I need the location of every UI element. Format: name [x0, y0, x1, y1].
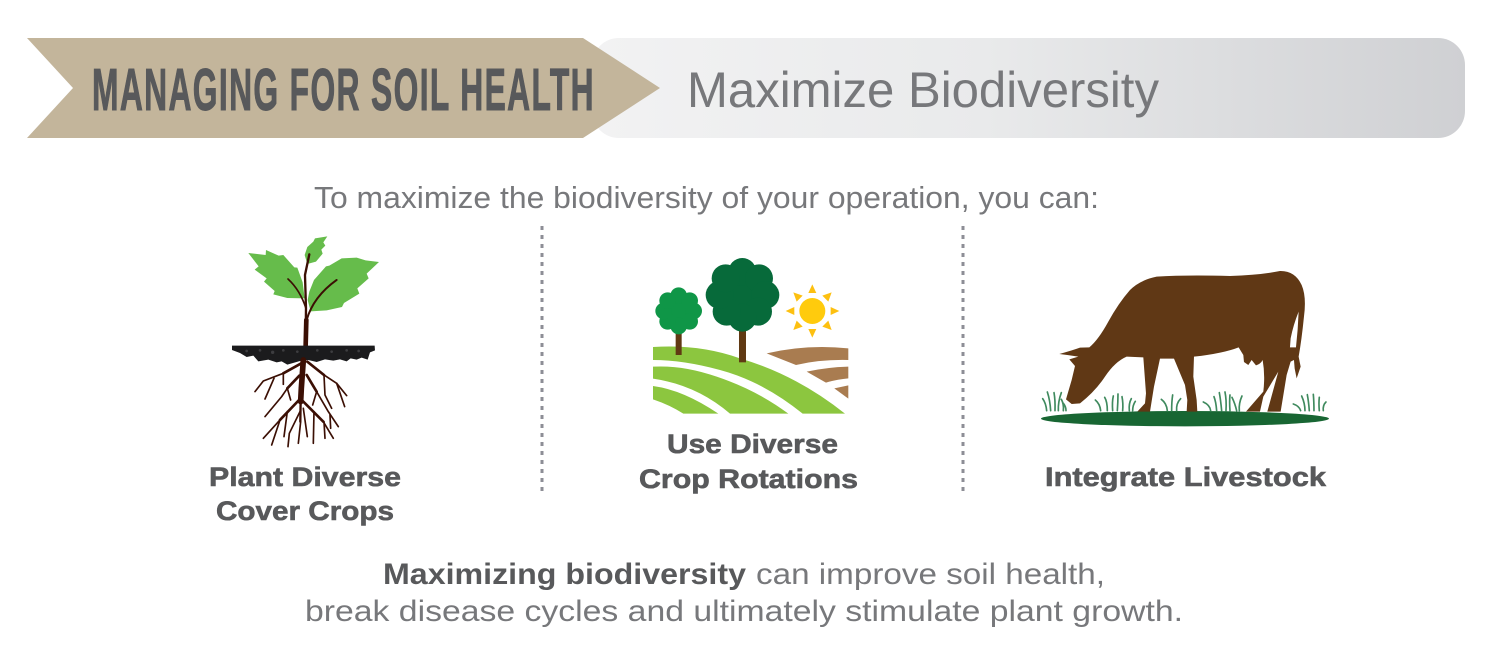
- leaves: [248, 236, 379, 311]
- closing statement: break disease cycles and ultimately stimulate plant growth.: [305, 595, 1183, 628]
- icon: plant with roots: [232, 236, 379, 447]
- label: integrate livestock: Integrate Livestock: [1045, 462, 1327, 492]
- cow silhouette: [1059, 271, 1305, 412]
- label: use diverse crop rotations: Use Diverse: [667, 429, 838, 459]
- large tree: [706, 258, 779, 362]
- label: use diverse crop rotations: [639, 429, 858, 494]
- roots: [255, 360, 347, 447]
- ground: [1041, 411, 1329, 426]
- subtitle: Maximize Biodiversity: [687, 62, 1159, 118]
- header subtitle bar: [592, 38, 1465, 138]
- title: MANAGING FOR SOIL HEALTH: [92, 57, 595, 123]
- intro sentence: To maximize the biodiversity of your operation, you can:: [314, 180, 1099, 215]
- closing statement: [305, 558, 1183, 628]
- sun: [786, 284, 839, 338]
- header title ribbon: [27, 38, 660, 138]
- label: plant diverse cover crops: [209, 462, 401, 526]
- icon: grazing cow: [1041, 271, 1329, 426]
- small tree: [655, 287, 702, 355]
- stem and branches: [288, 254, 337, 346]
- soil: [232, 346, 375, 365]
- label: plant diverse cover crops: Plant Diverse: [209, 462, 401, 492]
- fields: [653, 346, 848, 414]
- label: plant diverse cover crops: Cover Crops: [216, 496, 394, 526]
- label: use diverse crop rotations: Crop Rotations: [639, 464, 858, 494]
- closing statement: Maximizing biodiversity: [383, 558, 746, 591]
- icon: trees, sun and fields: [653, 258, 848, 414]
- closing statement: can improve soil health,: [756, 558, 1105, 591]
- grass: [1043, 392, 1326, 411]
